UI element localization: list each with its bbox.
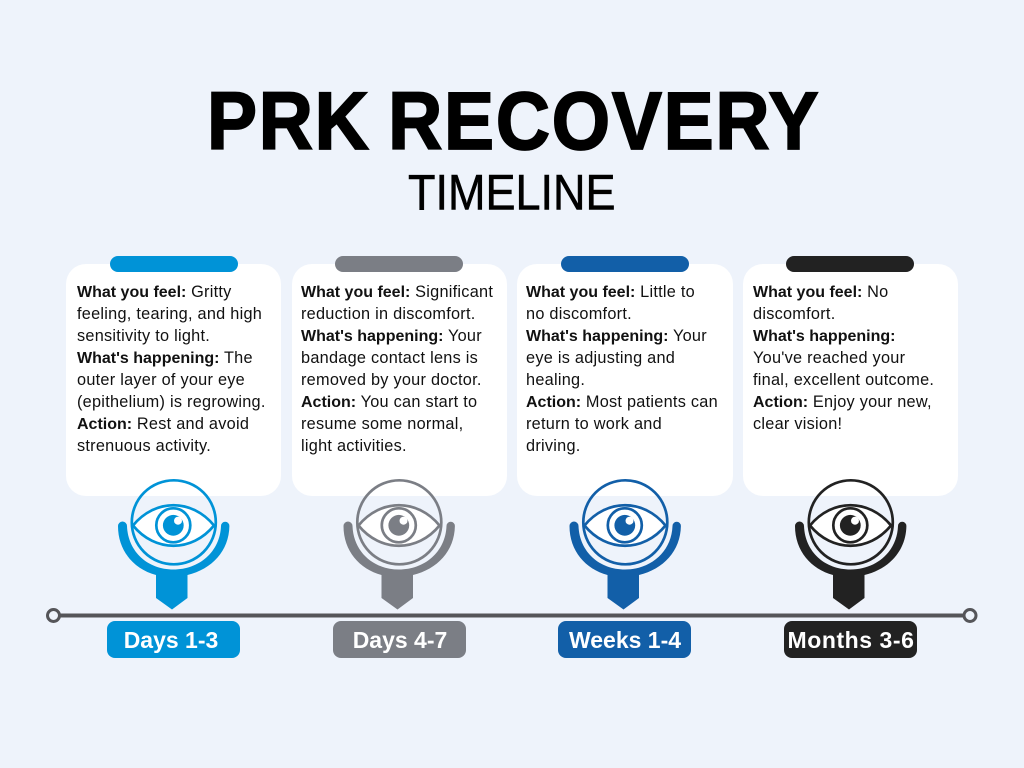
label: months 3-6: Months 3-6 [788, 627, 914, 653]
label: days 1-3: Days 1-3 [124, 627, 218, 653]
text block: eye is adjusting and [526, 349, 675, 367]
text block: driving. [526, 437, 581, 455]
text block: What you feel: Little to [526, 283, 695, 301]
text block: sensitivity to light. [77, 327, 210, 345]
text block: feeling, tearing, and high [77, 305, 262, 323]
colored tab [561, 256, 689, 272]
text block: return to work and [526, 415, 662, 433]
text block: light activities. [301, 437, 407, 455]
card background [743, 264, 958, 496]
panel: days 1-3 [66, 256, 281, 496]
icon: eye marker months 3-6 [795, 480, 906, 610]
card background [66, 264, 281, 496]
timeline axis [48, 610, 976, 622]
text block: What's happening: Your [526, 327, 707, 345]
label: days 4-7: Days 4-7 [353, 627, 447, 653]
text block: removed by your doctor. [301, 371, 482, 389]
text block: strenuous activity. [77, 437, 211, 455]
panel: months 3-6 [743, 256, 958, 496]
text block: You've reached your [753, 349, 906, 367]
icon: eye marker weeks 1-4 [570, 480, 681, 610]
label: months 3-6 [784, 621, 917, 658]
text block: no discomfort. [526, 305, 632, 323]
label: days 1-3 [107, 621, 240, 658]
text block: resume some normal, [301, 415, 463, 433]
card background [517, 264, 733, 496]
text block: What's happening: Your [301, 327, 482, 345]
text block: (epithelium) is regrowing. [77, 393, 266, 411]
text block: Action: Rest and avoid [77, 415, 249, 433]
text block: What you feel: Significant [301, 283, 493, 301]
label: weeks 1-4: Weeks 1-4 [569, 627, 681, 653]
text block: What you feel: No [753, 283, 888, 301]
text block: What's happening: [753, 328, 895, 345]
text block: Action: You can start to [301, 393, 477, 411]
label: weeks 1-4 [558, 621, 691, 658]
text block: clear vision! [753, 415, 842, 433]
text block: healing. [526, 371, 585, 389]
title: PRK RECOVERY [207, 75, 820, 167]
label: days 4-7 [333, 621, 466, 658]
text block: What you feel: Gritty [77, 283, 232, 301]
text block: outer layer of your eye [77, 371, 245, 389]
card background [292, 264, 507, 496]
text block: bandage contact lens is [301, 349, 478, 367]
panel: weeks 1-4 [517, 256, 733, 496]
colored tab [335, 256, 463, 272]
text block: discomfort. [753, 305, 835, 323]
panel: days 4-7 [292, 256, 507, 496]
subtitle: TIMELINE [408, 165, 615, 221]
text block: final, excellent outcome. [753, 371, 934, 389]
text block: What's happening: The [77, 349, 253, 367]
icon: eye marker days 4-7 [344, 480, 455, 610]
icon: eye marker days 1-3 [118, 480, 229, 610]
text block: Action: Most patients can [526, 393, 718, 411]
text block: Action: Enjoy your new, [753, 393, 932, 411]
colored tab [786, 256, 914, 272]
text block: reduction in discomfort. [301, 305, 476, 323]
colored tab [110, 256, 238, 272]
